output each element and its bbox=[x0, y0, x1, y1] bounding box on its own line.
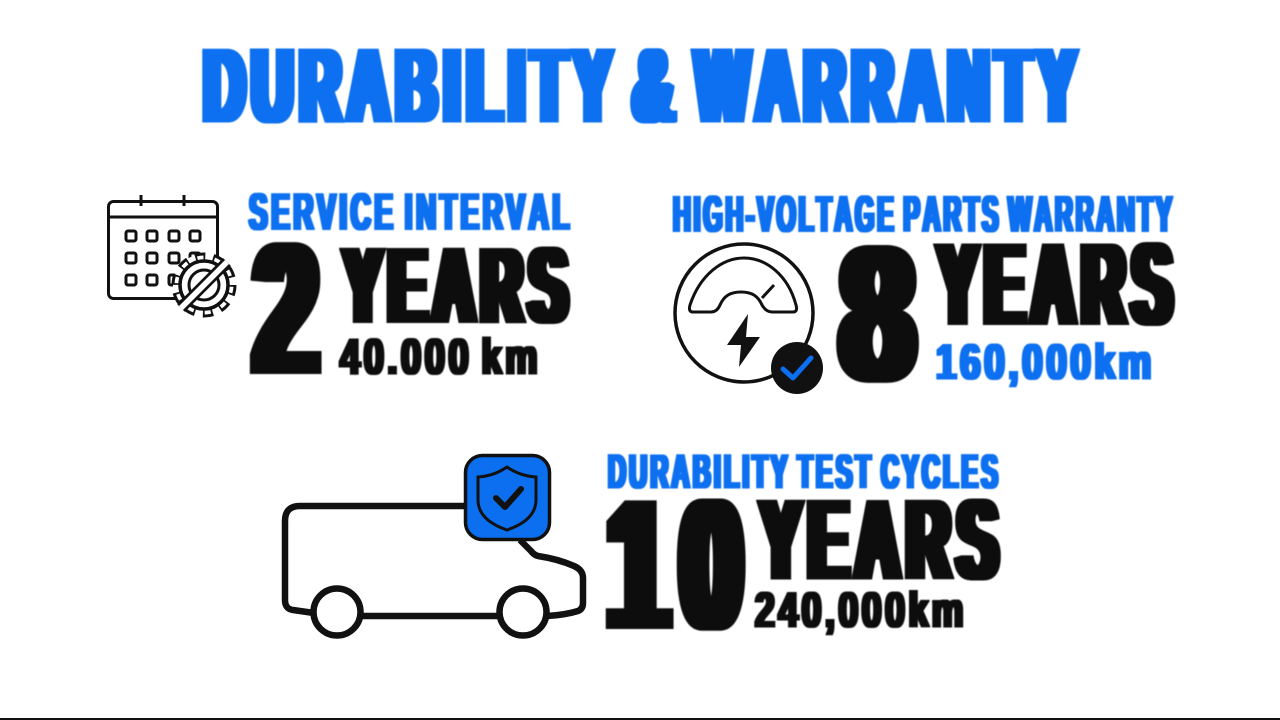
panel: service interval bbox=[108, 184, 574, 413]
distance: 160,000 km: 160,000km bbox=[936, 334, 1155, 390]
label: years: YEARS bbox=[761, 477, 1005, 604]
label: years: YEARS bbox=[344, 225, 574, 346]
icon: van with shield badge bbox=[285, 456, 583, 636]
panel: high-voltage parts warranty bbox=[673, 186, 1179, 421]
icon: gauge with bolt and check bbox=[675, 244, 823, 394]
heading: service interval: SERVICE INTERVAL bbox=[249, 184, 573, 242]
number: 10: 10 bbox=[608, 461, 755, 667]
distance: 40.000 km: 40.000 km bbox=[340, 328, 541, 385]
panel: durability test cycles bbox=[285, 446, 1005, 667]
number: 2: 2 bbox=[255, 206, 317, 413]
number: 8: 8 bbox=[841, 206, 914, 421]
icon: calendar with gear bbox=[108, 195, 235, 316]
distance: 240,000 km: 240,000km bbox=[755, 582, 967, 638]
